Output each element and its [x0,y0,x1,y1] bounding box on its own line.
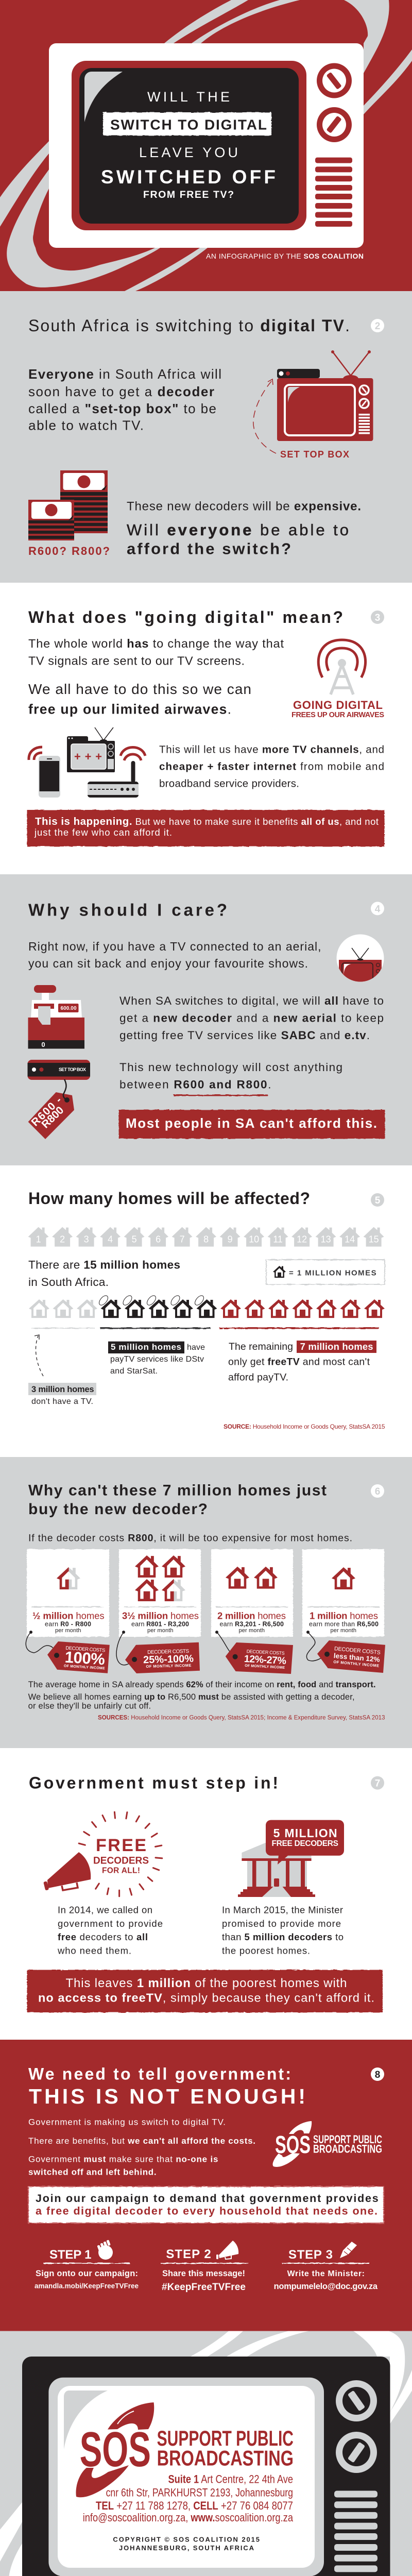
speech bubble: 5 million free decoders: 5 MILLION [273,1826,337,1840]
footer TV knobs [336,2380,377,2473]
homes: free TV only [220,1299,385,1318]
title: FROM FREE TV? [143,189,234,200]
logo: SOS support public broadcasting: SUPPORT PUBLIC [157,2426,294,2450]
tag: 12%-27%: DECODER COSTS [246,1649,285,1656]
number badge 5 [371,1193,384,1207]
callout: 1 million left [27,1970,383,2012]
tag: less than 12%: less than 12% [333,1652,380,1664]
world text [28,637,284,717]
footer TV cabinet [22,2357,390,2576]
tag: 12%-27%: OF MONTHLY INCOME [245,1664,285,1670]
callout: this is happening [27,810,384,846]
text: March 2015 promise: the poorest homes. [222,1945,310,1956]
panel: switching to digital [0,291,412,583]
TV speaker grille [315,158,352,227]
footer TV speaker grille [334,2490,377,2572]
government text: switched off and left behind. [28,2167,157,2177]
row: 15 numbered homes: 15 [369,1234,379,1245]
icon: TV in circle [337,935,384,982]
tag: 25%-100% [116,1631,200,1673]
icon: set top box with price tag [28,1060,90,1139]
label: 7 million homes: afford payTV. [228,1371,288,1383]
decoder text: get a new decoder and a new aerial to keep [119,1012,384,1024]
15 million text: in South Africa. [28,1276,109,1289]
number badge 4: 4 [375,904,381,914]
heading: Why can't these 7 million homes just [28,1482,327,1499]
step 2: STEP 2 [166,2247,211,2261]
row: 15 numbered homes: 3 [84,1234,89,1245]
tag: 25%-100%: DECODER COSTS [147,1649,190,1655]
row: 15 numbered homes [28,1227,384,1247]
title [101,89,276,200]
title: SWITCH TO DIGITAL [110,116,267,133]
icon: TV with set top box [277,350,373,441]
number badge 3 [371,611,384,624]
copyright: JOHANNESBURG, SOUTH AFRICA [119,2544,254,2552]
tag: 100%: OF MONTHLY INCOME [64,1665,105,1670]
icon: devices [29,727,145,798]
decoder text: getting free TV services like SABC and e.tv. [119,1029,370,1042]
number badge 6 [371,1484,384,1498]
label: going digital [291,699,384,719]
text: March 2015 promise: In March 2015, the Minister [222,1905,343,1916]
logo: SOS support public broadcasting: BROADCASTING [157,2446,294,2470]
label: going digital: FREES UP OUR AIRWAVES [291,711,384,719]
cost text: afford the switch? [127,540,291,558]
row: 15 numbered homes: 8 [203,1234,209,1245]
icon: government building [238,1843,315,1897]
tag: 12%-27%: 12%-27% [244,1653,286,1667]
panel: why can't they buy [0,1457,412,1748]
tag: 100%: 100% [64,1648,106,1668]
text: free decoders for all [93,1836,149,1875]
row: 15 numbered homes: 5 [132,1234,137,1245]
row: 15 numbered homes: 14 [345,1234,355,1245]
step 2 [161,2241,248,2293]
footer swirl [0,2331,412,2576]
tag: 100%: DECODER COSTS [65,1646,106,1653]
icon: cash register [28,985,84,1049]
heading [28,1482,327,1518]
card: 3.5 million homes [119,1549,201,1637]
panel: header [0,0,412,291]
intro text: Everyone in South Africa will [28,366,221,382]
arrow: dashed to grey homes [35,1335,43,1376]
icon: pencil [340,2242,357,2258]
row: 15 numbered homes: 2 [60,1234,65,1245]
row: 15 numbered homes: 11 [273,1234,283,1245]
panel: tell government [0,2040,412,2331]
step 3 [274,2242,378,2291]
source: SOURCE: Household Income or Goods Query, StatsSA 2015 [224,1423,385,1430]
speech bubble: 5 million free decoders [266,1820,344,1865]
title: WILL THE [147,89,230,105]
number badge 2: 2 [375,321,380,332]
homes: no TV [29,1299,97,1318]
panel: what going digital means [0,583,412,874]
label: 7 million homes: 7 million homes [300,1341,373,1352]
number badge 2 [371,319,384,332]
contact details: Suite 1 Art Centre, 22 4th Ave [168,2473,293,2486]
card: 1 million homes: 1 million homes [310,1611,378,1621]
copyright [113,2536,260,2552]
card: 2 million homes: earn R3,201 - R6,500 [219,1621,284,1628]
logo: SOS support public broadcasting: SOS [80,2422,151,2477]
logo: SOS: BROADCASTING [313,2142,382,2156]
tag: less than 12%: OF MONTHLY INCOME [333,1659,379,1668]
text: March 2015 promise: promised to provide more [222,1918,341,1929]
15 million text [28,1258,180,1289]
step 1: amandla.mobi/KeepFreeTVFree [35,2282,139,2290]
step 1: STEP 1 [49,2248,92,2262]
callout: join campaign: Join our campaign to demand that government provides [36,2192,379,2205]
right now text: Right now, if you have a TV connected to an aerial, [28,940,321,953]
world text: TV signals are sent to our TV screens. [28,654,245,668]
icon: fist [97,2240,113,2260]
government text: There are benefits, but we can't all afford the costs. [28,2136,255,2146]
label: 3 million homes: don't have a TV. [31,1397,93,1406]
label: price question: R600? R800? [28,545,110,557]
label: 5 million homes: have [187,1343,205,1352]
legend: = 1 MILLION HOMES [289,1269,376,1278]
callout: this is happening: just the few who can afford it. [34,827,172,838]
heading: buy the new decoder? [28,1501,208,1518]
text: 2014 call: who need them. [57,1945,131,1956]
legend [266,1260,385,1284]
step 2: #KeepFreeTVFree [162,2282,246,2293]
row: 15 numbered homes: 7 [180,1234,185,1245]
arrow: dashed to set top box [253,379,276,453]
title: LEAVE YOU [139,145,238,160]
callout: join campaign [28,2187,384,2223]
cost text [127,500,361,558]
government text [28,2117,255,2177]
benefits text [159,744,384,789]
logo: SOS: SOS [275,2131,311,2159]
R800 text: If the decoder costs R800, it will be too expensive for most homes. [28,1533,352,1544]
text: 2014 call: free decoders to all [58,1931,148,1942]
logo: SOS [273,2121,382,2167]
card: half million homes: ½ million homes [32,1611,105,1621]
average home text: The average home in SA already spends 62% of their income on rent, food and transport. [28,1680,376,1689]
government text: Government is making us switch to digital TV. [28,2117,226,2127]
card: 1 million homes [302,1549,384,1637]
speech bubble: 5 million free decoders: FREE DECODERS [272,1839,338,1848]
row: 15 numbered homes: 9 [228,1234,233,1245]
number badge 5: 5 [375,1195,381,1206]
logo: SOS: SUPPORT PUBLIC [313,2133,382,2146]
text: free decoders for all: DECODERS [93,1856,149,1867]
panel: government must step in [0,1748,412,2040]
number badge 6: 6 [375,1486,380,1497]
right now text [28,940,321,970]
text: 2014 call [57,1905,163,1956]
card: 3.5 million homes: 3½ million homes [122,1611,199,1621]
logo: SOS support public broadcasting [76,2402,294,2497]
average home text: We believe all homes earning up to R6,500 must be assisted with getting a decoder, [28,1692,355,1702]
card: half million homes: per month [55,1628,81,1634]
tag: 100% [26,1631,110,1673]
benefits text: This will let us have more TV channels, and [159,744,384,756]
homes: payTV with dishes [97,1294,217,1318]
cost text: Will everyone be able to [127,521,349,539]
icon: money stacks [28,470,108,540]
heading: South Africa is switching to digital TV. [28,316,350,335]
icon: set top box with price tag: SET TOP BOX [59,1067,86,1072]
benefits text: cheaper + faster internet from mobile and [159,760,384,772]
swirl [0,0,412,291]
card: half million homes: earn R0 - R800 [45,1621,91,1628]
card: half million homes [27,1549,109,1637]
card: 2 million homes: per month [239,1628,265,1634]
icon: small TV [67,727,115,772]
average home text [28,1680,376,1711]
label: 7 million homes: The remaining [229,1341,293,1352]
panel: footer [0,2331,412,2576]
text: 2014 call: government to provide [58,1918,163,1929]
label: 3 million homes [28,1383,96,1406]
world text: We all have to do this so we can [28,681,251,697]
heading [28,2065,305,2108]
number badge 4 [371,902,384,915]
card: 3.5 million homes: earn R801 - R3,200 [131,1621,189,1628]
icon: megaphone with rays [43,1812,162,1896]
card: 1 million homes: earn more than R6,500 [309,1621,379,1628]
step 1 [35,2240,139,2290]
number badge 7 [371,1776,384,1790]
row: 15 numbered homes: 12 [297,1234,307,1245]
text: 2014 call: In 2014, we called on [58,1905,152,1916]
decoder text [119,994,384,1091]
contact details: info@soscoalition.org.za, www.soscoalition.org.za [83,2511,294,2524]
tag: 12%-27% [215,1631,293,1674]
label: 7 million homes: only get freeTV and most can't [228,1356,370,1367]
label: 5 million homes: payTV services like DStv [110,1355,204,1364]
tag: less than 12%: DECODER COSTS [334,1646,381,1656]
government text: Government must make sure that no-one is [28,2155,218,2164]
copyright: COPYRIGHT © SOS COALITION 2015 [113,2536,260,2544]
heading: We need to tell government: [28,2065,291,2083]
number badge 3: 3 [375,613,380,623]
title: SWITCHED OFF [101,166,276,188]
sources: SOURCES: Household Income or Goods Query, StatsSA 2015; Income & Expenditure Survey, StatsSA 2013 [98,1715,385,1721]
average home text: or else they'll be unfairly cut off. [28,1702,151,1711]
icon: set top box with price tag: R800 [39,1104,66,1131]
heading: Why should I care? [28,901,227,920]
credit line: AN INFOGRAPHIC BY THE SOS COALITION [206,252,364,260]
callout: join campaign: a free digital decoder to every household that needs one. [36,2205,377,2217]
intro text [28,366,221,433]
label: going digital: GOING DIGITAL [293,699,383,711]
label: 3 million homes: 3 million homes [31,1385,94,1394]
icon: broadcast tower [318,640,366,694]
step 1: Sign onto our campaign: [36,2269,138,2278]
card: 2 million homes [211,1549,293,1637]
step 3: STEP 3 [288,2248,333,2262]
row: 15 numbered homes: 13 [321,1234,331,1245]
row: 15 numbered homes: 10 [249,1234,259,1245]
callout: 1 million left: no access to freeTV, simply because they can't afford it. [38,1991,374,2005]
contact details: cnr 6th Str, PARKHURST 2193, Johannesburg [106,2486,293,2499]
card: 3.5 million homes: per month [147,1628,173,1634]
tag: 25%-100%: 25%-100% [143,1653,194,1666]
contact details: TEL +27 11 788 1278, CELL +27 76 084 8077 [96,2499,293,2512]
contact details [83,2473,294,2524]
intro text: called a "set-top box" to be [28,401,216,416]
icon: megaphone [216,2241,238,2259]
icon: cash register: 600.00 [61,1006,77,1011]
label: 5 million homes: and StarSat. [110,1367,158,1376]
number badge 8 [371,2067,384,2081]
world text: The whole world has to change the way that [28,637,284,650]
heading: Government must step in! [29,1774,278,1792]
intro text: soon have to get a decoder [28,384,214,399]
row: 15 numbered homes: 6 [156,1234,161,1245]
text: free decoders for all: FOR ALL! [102,1866,140,1875]
icon: set top box with price tag: R600 - [29,1094,64,1129]
step 2: Share this message! [162,2269,245,2278]
icon: router [88,747,145,798]
15 million text: There are 15 million homes [28,1258,180,1272]
text: March 2015 promise: than 5 million decoders to [222,1931,344,1942]
callout: this is happening: This is happening. But we have to make sure it benefits all of us, and not [35,816,379,827]
TV knobs [317,63,352,142]
icon: cash register: 0 [41,1041,45,1048]
right now text: you can sit back and enjoy your favourite shows. [28,957,308,970]
label: 7 million homes [228,1341,376,1383]
callout: 1 million left: This leaves 1 million of the poorest homes with [66,1976,347,1990]
row: 15 numbered homes: 1 [36,1234,41,1245]
text: free decoders for all: FREE [96,1836,146,1855]
label: 5 million homes [108,1342,205,1376]
heading: How many homes will be affected? [28,1189,310,1208]
intro text: able to watch TV. [28,417,144,433]
decoder text: between R600 and R800. [119,1078,271,1091]
panel: why should I care [0,874,412,1165]
TV cabinet [49,43,364,248]
number badge 7: 7 [375,1778,380,1789]
tag: 25%-100%: OF MONTHLY INCOME [146,1663,192,1669]
tag: less than 12% [306,1631,385,1673]
callout: can't afford: Most people in SA can't afford this. [126,1115,377,1131]
decoder text: When SA switches to digital, we will all have to [119,994,384,1007]
heading: What does "going digital" mean? [28,608,343,626]
label: set top box: SET TOP BOX [280,449,349,460]
row: homes by type [29,1294,385,1318]
world text: free up our limited airwaves. [28,702,231,717]
heading: THIS IS NOT ENOUGH! [29,2084,305,2108]
card: 1 million homes: per month [331,1628,356,1634]
label: 5 million homes: 5 million homes [111,1342,181,1352]
number badge 8: 8 [375,2070,380,2080]
step 3: Write the Minister: [287,2269,365,2278]
icon: small TV: +++ [74,750,102,763]
text: March 2015 promise [222,1905,344,1956]
callout: can't afford [118,1110,385,1139]
decoder text: This new technology will cost anything [119,1061,342,1074]
icon: phone [29,747,60,798]
card: 2 million homes: 2 million homes [217,1611,286,1621]
benefits text: broadband service providers. [159,777,299,789]
step 3: nompumelelo@doc.gov.za [274,2282,378,2291]
row: 15 numbered homes: 4 [108,1234,113,1245]
cost text: These new decoders will be expensive. [127,500,361,514]
panel: how many homes [0,1165,412,1457]
